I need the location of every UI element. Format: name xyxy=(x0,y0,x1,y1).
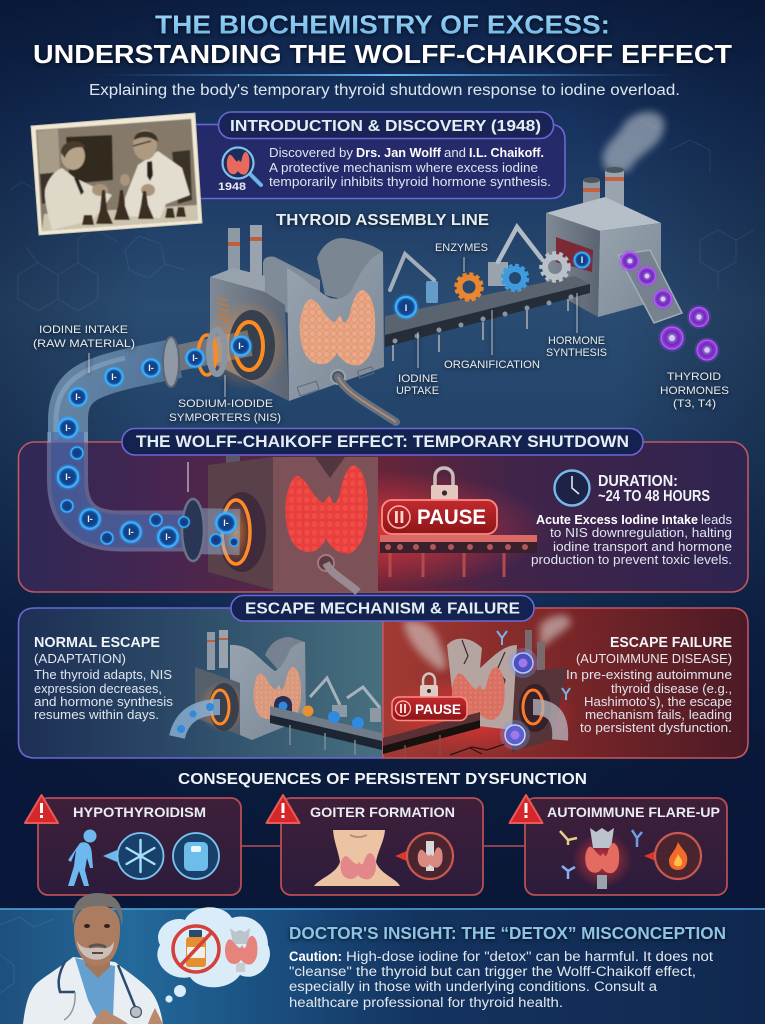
card: autoimmune flare-up xyxy=(510,795,727,895)
doctor's insight heading: DOCTOR'S INSIGHT: THE “DETOX” MISCONCEPTION xyxy=(289,923,726,943)
label: hormone synthesis xyxy=(546,335,607,359)
icon: scale xyxy=(173,833,219,879)
icon: warning xyxy=(510,795,542,823)
title: UNDERSTANDING THE WOLFF-CHAIKOFF EFFECT xyxy=(33,39,732,69)
paused conveyor xyxy=(380,535,537,577)
conveyor belt xyxy=(385,227,590,361)
intro text: temporarily inhibits thyroid hormone synthesis. xyxy=(269,175,551,189)
icon: padlock xyxy=(420,674,438,698)
red thyroid gland xyxy=(285,465,368,553)
shutdown text: production to prevent toxic levels. xyxy=(531,553,732,567)
sub-panel: normal escape xyxy=(18,608,383,758)
escape failure text: (AUTOIMMUNE DISEASE) xyxy=(576,651,732,666)
heading pill: escape: ESCAPE MECHANISM & FAILURE xyxy=(245,600,520,618)
heading: thyroid assembly line: THYROID ASSEMBLY LINE xyxy=(276,212,489,229)
normal escape text xyxy=(34,634,173,722)
doctor xyxy=(23,893,163,1024)
right scientist xyxy=(125,151,190,218)
heading: consequences: CONSEQUENCES OF PERSISTENT DYSFUNCTION xyxy=(178,771,587,788)
heading pill: escape xyxy=(231,596,534,621)
label: iodine intake: (RAW MATERIAL) xyxy=(33,338,135,350)
mini factory failing xyxy=(383,630,567,757)
icon: blue gear xyxy=(502,266,528,290)
thyroid gland xyxy=(300,290,375,365)
escape failure text: thyroid disease (e.g., xyxy=(611,682,732,696)
shutdown pipe xyxy=(68,432,240,561)
duration: DURATION: xyxy=(598,473,678,490)
shutdown text: to NIS downregulation, halting xyxy=(550,526,732,540)
assembly line labels xyxy=(33,242,729,424)
shutdown text: leads xyxy=(701,513,732,527)
neck illustration xyxy=(314,830,400,886)
ions: I- xyxy=(65,423,71,433)
normal escape text: resumes within days. xyxy=(34,708,159,722)
escape failure text: In pre-existing autoimmune xyxy=(566,668,732,682)
photo: Drs. Wolff and Chaikoff xyxy=(31,113,202,235)
icon: snowflake xyxy=(103,833,164,879)
caution text: High-dose iodine for "detox" can be harmful. It does not xyxy=(346,949,713,964)
card: autoimmune flare-up: AUTOIMMUNE FLARE-UP xyxy=(547,804,720,820)
label: thyroid hormones: (T3, T4) xyxy=(673,398,716,410)
banner: doctor's insight xyxy=(0,893,765,1024)
caution text xyxy=(289,949,713,1010)
panel: introduction and discovery xyxy=(195,112,565,198)
front face xyxy=(287,252,384,401)
label: NIS xyxy=(169,398,281,424)
label: NIS: SODIUM-IODIDE xyxy=(178,398,273,410)
pipe: iodine raw material: I- xyxy=(111,372,117,382)
label: thyroid hormones: HORMONES xyxy=(660,385,729,397)
icon: no iodine bottle xyxy=(173,926,219,972)
label: hormone synthesis: HORMONE xyxy=(548,335,605,347)
heading pill: shutdown: THE WOLFF-CHAIKOFF EFFECT: TEMPORARY SHUTDOWN xyxy=(136,432,629,451)
label: iodine uptake: IODINE xyxy=(398,373,438,385)
shutdown factory xyxy=(208,456,378,592)
chute with hormones xyxy=(618,250,682,323)
inflamed thyroid xyxy=(572,828,632,889)
consequence connectors xyxy=(241,845,525,847)
icon: thyroid xyxy=(225,928,257,972)
factory: hormone output with smoke: I xyxy=(581,255,583,265)
caution text: Caution: xyxy=(289,949,342,964)
subtitle: Explaining the body's temporary thyroid shutdown response to iodine overload. xyxy=(89,82,680,99)
panel: escape mechanism and failure xyxy=(18,596,748,758)
escape failure text: mechanism fails, leading xyxy=(585,708,732,722)
mini factory healthy xyxy=(177,630,382,755)
normal escape text: NORMAL ESCAPE xyxy=(34,634,160,651)
normal escape text: expression decreases, xyxy=(34,682,162,696)
escape failure text: to persistent dysfunction. xyxy=(580,721,732,735)
shutdown text: Acute Excess Iodine Intake xyxy=(536,513,698,527)
ions: I- xyxy=(223,518,229,528)
intro text: Discovered by xyxy=(269,146,354,160)
intro text: I.L. Chaikoff. xyxy=(469,146,544,160)
shutdown text xyxy=(531,513,732,567)
label: iodine intake: IODINE INTAKE xyxy=(39,324,128,336)
immune cells xyxy=(497,631,570,750)
flasks xyxy=(82,190,186,225)
icon: antibodies xyxy=(560,830,642,879)
ions: I- xyxy=(165,532,171,542)
red glow xyxy=(210,470,550,590)
normal escape text: and hormone synthesis xyxy=(34,695,173,709)
left scientist xyxy=(45,168,112,230)
caution text: "cleanse" the thyroid but can trigger the Wolff-Chaikoff effect, xyxy=(289,964,696,979)
card: goiter formation: GOITER FORMATION xyxy=(310,804,455,820)
shutdown text: iodine transport and hormone xyxy=(553,540,732,554)
label: NIS: SYMPORTERS (NIS) xyxy=(169,412,281,424)
ions xyxy=(55,416,239,549)
pause button xyxy=(382,500,497,534)
intro text: A protective mechanism where excess iodine xyxy=(269,161,538,175)
ions: I- xyxy=(65,472,71,482)
icon: warning xyxy=(266,795,300,823)
label: organification: ORGANIFICATION xyxy=(444,359,540,371)
escape failure text xyxy=(566,634,732,735)
left box top xyxy=(210,268,265,292)
heading pill: introduction xyxy=(218,112,554,138)
heading pill: shutdown xyxy=(122,428,643,455)
heading pill: introduction: INTRODUCTION & DISCOVERY (1948) xyxy=(230,118,541,135)
ions: I- xyxy=(128,527,134,537)
icon: thyroid hormones xyxy=(658,305,720,363)
intro text: and xyxy=(444,146,466,160)
panel: Wolff-Chaikoff effect xyxy=(18,416,748,592)
robot arm: enzymes xyxy=(488,227,541,286)
title xyxy=(33,12,732,69)
icon: tired person xyxy=(68,830,96,886)
intro text xyxy=(269,146,551,189)
icon: thyroid magnified xyxy=(395,833,453,879)
icon: orange gear xyxy=(456,274,482,300)
label: enzymes: ENZYMES xyxy=(435,242,488,254)
icon: flame xyxy=(644,833,701,879)
factory: hormone output with smoke xyxy=(546,112,682,323)
pipe: iodine raw material: I- xyxy=(148,363,154,373)
escape failure text: ESCAPE FAILURE xyxy=(610,634,732,651)
upper side wall xyxy=(263,257,320,330)
icon: padlock xyxy=(431,468,458,502)
smoke xyxy=(403,615,571,670)
label: iodine uptake: UPTAKE xyxy=(396,385,439,397)
card: goiter formation xyxy=(266,795,483,895)
normal escape text: The thyroid adapts, NIS xyxy=(34,668,172,682)
card: hypothyroidism: HYPOTHYROIDISM xyxy=(73,804,206,820)
icon: magnifier 1948: 1948 xyxy=(218,181,246,193)
normal escape text: (ADAPTATION) xyxy=(34,651,126,666)
pause button xyxy=(392,697,467,720)
icon: magnifier 1948 xyxy=(218,148,261,193)
conveyor belt: I xyxy=(405,303,407,313)
pipe: iodine raw material: I- xyxy=(192,353,198,363)
ions: I- xyxy=(87,514,93,524)
card: hypothyroidism xyxy=(25,795,241,895)
pipe: iodine raw material xyxy=(56,322,263,442)
label: thyroid hormones: THYROID xyxy=(667,371,721,383)
pipe: iodine raw material: I- xyxy=(65,422,71,432)
pipe: iodine raw material: I- xyxy=(238,341,244,351)
duration xyxy=(598,473,710,505)
escape failure text: Hashimoto's), the escape xyxy=(584,695,732,709)
caution text: especially in those with underlying conditions. Consult a xyxy=(289,979,658,994)
duration: ~24 TO 48 HOURS xyxy=(598,488,710,505)
sub-panel: escape failure xyxy=(380,608,748,758)
title: THE BIOCHEMISTRY OF EXCESS: xyxy=(155,12,610,40)
pipe: iodine raw material: I- xyxy=(75,392,81,402)
label: iodine uptake xyxy=(396,373,439,397)
icon: warning xyxy=(25,795,58,823)
caution text: healthcare professional for thyroid health. xyxy=(289,995,563,1010)
factory: thyroid xyxy=(204,225,396,422)
rear hump xyxy=(317,238,383,300)
left box xyxy=(210,277,289,401)
pause button: PAUSE xyxy=(417,506,486,529)
icon: clock xyxy=(554,470,590,506)
pause button: PAUSE xyxy=(415,701,461,717)
label: thyroid hormones xyxy=(660,371,729,410)
robot arm: iodine uptake xyxy=(390,254,434,290)
label: iodine intake xyxy=(33,324,135,350)
label: hormone synthesis: SYNTHESIS xyxy=(546,347,607,359)
icon: grey gear xyxy=(541,253,569,281)
thought bubble xyxy=(157,907,270,1003)
intro text: Drs. Jan Wolff xyxy=(356,146,442,160)
